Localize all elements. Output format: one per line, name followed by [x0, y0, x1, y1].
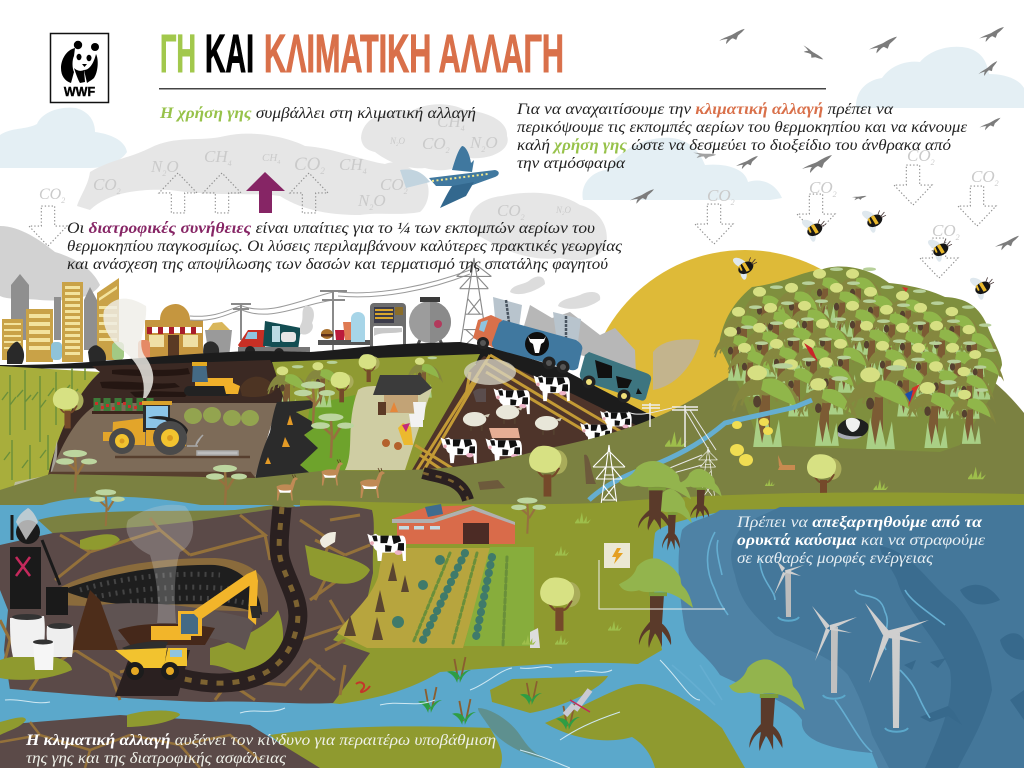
tree on corn field [53, 388, 84, 428]
burned deforested strip [255, 400, 318, 480]
lake [0, 497, 235, 548]
greenhouse gas labels in the sky: 2 [117, 187, 121, 196]
greenhouse gas labels in the sky: 2 [931, 158, 935, 167]
text block: fossil fuels: ορυκτά καύσιμα και να στραφούμε [737, 532, 986, 549]
greenhouse gas labels in the sky: O [399, 136, 406, 146]
deer [778, 455, 795, 470]
corn field [0, 366, 100, 500]
greenhouse gas labels in the sky: 2 [404, 187, 408, 196]
cloud: top right pale blue [856, 47, 1024, 108]
greenhouse gas labels in the sky [39, 112, 999, 242]
field furrows [48, 457, 254, 483]
greenhouse gas labels in the sky: 2 [995, 179, 999, 188]
title: ΚΑΙ [205, 24, 254, 84]
greenhouse gas labels in the sky: N [151, 157, 162, 176]
acacia in lake [89, 489, 125, 526]
text block: stop climate change: καλή χρήση γης ώστε να δεσμεύει το διοξείδιο του άνθρακα από [517, 137, 951, 154]
ploughed field [50, 403, 278, 478]
power pylons and poles: white [593, 403, 717, 535]
offshore wind turbines [774, 561, 929, 728]
dragonfly [565, 690, 590, 715]
greenhouse gas labels in the sky: 4 [277, 159, 280, 166]
greenhouse gas labels in the sky: N [470, 133, 481, 152]
greenhouse gas labels in the sky: 2 [162, 169, 166, 178]
black road and railway embankment [0, 342, 668, 434]
lower bright green land [300, 493, 1024, 704]
tomato and lettuce rows [92, 398, 259, 426]
greenhouse gas labels in the sky: CO [907, 146, 931, 165]
greenhouse gas labels in the sky: O [485, 133, 498, 152]
text block: food habits: θερμοκηπίου παγκοσμίως. Οι λύσεις περιλαμβάνουν καλύτερες πρακτικές γεωργίας [67, 238, 623, 255]
coal pit [55, 558, 268, 650]
greenhouse gas labels in the sky: CO [809, 178, 833, 197]
text block: food habits: Οι διατροφικές συνήθειες είναι υπαίτιες για το ¼ των εκπομπών αερίων του [67, 220, 595, 237]
greenhouse gas labels in the sky: CH [262, 152, 277, 164]
corn stalks [2, 368, 85, 490]
greenhouse gas labels in the sky: CO [497, 201, 521, 220]
text block: climate change risk: της γης και της διατροφικής ασφάλειας [26, 750, 287, 767]
greenhouse gas labels in the sky: 2 [562, 212, 565, 217]
icon: airplane [400, 146, 499, 208]
greenhouse gas labels in the sky: 2 [369, 203, 373, 212]
greenhouse gas labels in the sky: CO [932, 221, 956, 240]
greenhouse gas labels in the sky: CO [39, 186, 61, 203]
crocodile [478, 708, 552, 760]
lower stone cracks [0, 722, 260, 768]
truck with animal silhouettes [580, 352, 651, 402]
rabbit and snake [356, 628, 540, 692]
greenhouse gas labels in the sky: CO [294, 154, 320, 175]
dotted arrows: gas flows [29, 165, 996, 278]
text block: fossil fuels: σε καθαρές μορφές ενέργειας [737, 550, 934, 567]
coal sacks [10, 614, 73, 670]
greenhouse gas labels in the sky: N [358, 191, 369, 210]
cow at field [367, 534, 406, 561]
greenhouse gas labels in the sky: 2 [446, 146, 450, 155]
greenhouse gas labels in the sky: CO [380, 175, 404, 194]
title: ΚΛΙΜΑΤΙΚΗ ΑΛΛΑΓΗ [264, 24, 564, 84]
greenhouse gas labels in the sky: CO [971, 167, 995, 186]
greenhouse gas labels in the sky: N [390, 136, 396, 146]
vending machine [370, 303, 406, 351]
greenhouse gas labels in the sky: 4 [363, 167, 367, 176]
dark soil furrows [100, 368, 190, 397]
tractor with plough [103, 401, 238, 455]
bright grass patch [300, 395, 355, 475]
greenhouse gas labels in the sky: O [565, 205, 572, 215]
pylon on track [457, 258, 491, 350]
greenhouse gas labels in the sky: N [556, 205, 562, 215]
title rule [159, 88, 826, 90]
meerkat and rodent [478, 455, 596, 490]
small winding road [423, 473, 468, 500]
smoke: white tractor plume over city [103, 299, 153, 398]
trees at clearing [294, 354, 380, 458]
greenhouse gas labels in the sky: 4 [228, 159, 232, 168]
text block: stop climate change: περικόψουμε τις εκπομπές αερίων του θερμοκηπίου και να κάνουμε [517, 119, 968, 136]
left water strip [0, 590, 10, 690]
farm yard soil [412, 356, 650, 470]
factory and cooling towers [493, 277, 636, 375]
gazelles [276, 460, 385, 500]
green islands [270, 676, 745, 768]
green moss patches [0, 534, 370, 735]
greenhouse gas labels in the sky: 2 [61, 196, 65, 205]
tree and grass near coast [511, 497, 622, 645]
parrots and butterflies [730, 287, 920, 466]
sun [585, 250, 905, 570]
greenhouse gas labels in the sky: 2 [731, 198, 735, 207]
bulldozer [184, 362, 276, 397]
fences [415, 355, 625, 472]
energy box with bolt and wiring [599, 543, 725, 609]
greenhouse gas labels in the sky: 2 [396, 143, 399, 148]
sea: mid layer [679, 505, 1024, 768]
greenhouse gas labels in the sky: CO [93, 175, 117, 194]
rubbish bags and recycling bins [7, 322, 232, 366]
smoke over mine [127, 505, 193, 623]
power poles and lines [190, 270, 470, 350]
reeds [418, 657, 580, 730]
cloud: middle pale blue [582, 138, 782, 200]
greenhouse gas labels in the sky: 2 [833, 190, 837, 199]
sea: deep layer [731, 505, 1024, 768]
text block: climate change risk: Η κλιματική αλλαγή αυξάνει τον κίνδυνο για περαιτέρω υποβάθμιση [25, 732, 496, 749]
mine rock ground [0, 505, 374, 703]
cloud: left pale blue [0, 108, 127, 168]
dense forest [714, 267, 1004, 449]
WWF logo: WWF [64, 85, 95, 99]
mangroves [619, 461, 805, 751]
text block: stop climate change [516, 101, 968, 172]
crop field [337, 547, 534, 648]
olive hillside [0, 330, 1024, 530]
water base [0, 505, 1024, 768]
birds [630, 27, 1019, 250]
text block: stop climate change: την ατμόσφαιρα [517, 155, 626, 172]
truck with cow emblem [473, 315, 582, 374]
greenhouse gas labels in the sky: 2 [521, 213, 525, 222]
greenhouse gas labels in the sky: CH [204, 147, 228, 166]
smoke: field plume [7, 440, 57, 515]
sea: darkest shadow band [880, 546, 992, 768]
greenhouse gas labels in the sky: O [373, 191, 386, 210]
mine cracks [0, 515, 370, 700]
dirt path [345, 386, 432, 470]
title [160, 24, 564, 84]
farm building with solar panel [392, 504, 515, 544]
arrow: purple emissions up [246, 172, 285, 213]
title: ΓΗ [160, 24, 196, 84]
lower stones [0, 715, 320, 768]
sea silhouettes [904, 585, 1024, 725]
sea wave lines [672, 532, 945, 752]
text block: fossil fuels [736, 514, 986, 567]
food processing conveyor [318, 312, 370, 345]
greenhouse gas labels in the sky: CO [707, 186, 731, 205]
palm trees at clearing [267, 357, 443, 415]
river wave lines [5, 660, 700, 768]
text block: stop climate change: Για να αναχαιτίσουμε την κλιματική αλλαγή πρέπει να [516, 101, 894, 118]
river on hill [589, 400, 812, 500]
delivery truck [238, 306, 314, 358]
forest backing mass [719, 266, 1002, 452]
text block: fossil fuels: Πρέπει να απεξαρτηθούμε από τα [736, 514, 983, 531]
hut and cooking fire [373, 375, 432, 450]
mine road [180, 507, 298, 683]
subtitle: land use: Η χρήση γης συμβάλλει στη κλιματική αλλαγή [159, 105, 476, 122]
hillside trees and grass [56, 431, 986, 508]
green forest clearing [255, 354, 480, 478]
text block: food habits: και ανάσχεση της αποψίλωσης των δασών και τερματισμό της σπατάλης φαγητού [67, 256, 608, 273]
tank [409, 297, 451, 355]
smoke: gray plume city [0, 226, 100, 300]
city skyline [2, 274, 119, 362]
text block: food habits [67, 220, 623, 273]
smoke from truck area [653, 339, 700, 390]
smog cloud: greenhouse gases [77, 104, 607, 260]
WWF logo [50, 34, 108, 102]
dump truck base [115, 650, 190, 696]
skull [320, 532, 336, 548]
tilled soil [48, 360, 290, 476]
smoke: over fence [464, 359, 516, 385]
panda [838, 418, 868, 439]
dump truck [115, 641, 187, 680]
greenhouse gas labels in the sky: O [166, 157, 179, 176]
greenhouse gas labels in the sky: 4 [461, 124, 465, 133]
greenhouse gas labels in the sky: 2 [481, 145, 485, 154]
bees [731, 209, 994, 300]
olive band below lake [38, 503, 300, 540]
turbine water ripples [778, 617, 908, 732]
text block: climate change risk [25, 732, 496, 767]
mine headframe with X [10, 508, 68, 615]
greenhouse gas labels in the sky: CO [422, 134, 446, 153]
greenhouse gas labels in the sky: 2 [320, 166, 325, 176]
greenhouse gas labels in the sky: CH [437, 112, 461, 131]
shop with awning [145, 304, 203, 358]
greenhouse gas labels in the sky: 2 [956, 233, 960, 242]
farm animals [441, 376, 632, 464]
flames [265, 415, 293, 464]
greenhouse gas labels in the sky: CH [339, 155, 363, 174]
excavator [151, 570, 260, 640]
